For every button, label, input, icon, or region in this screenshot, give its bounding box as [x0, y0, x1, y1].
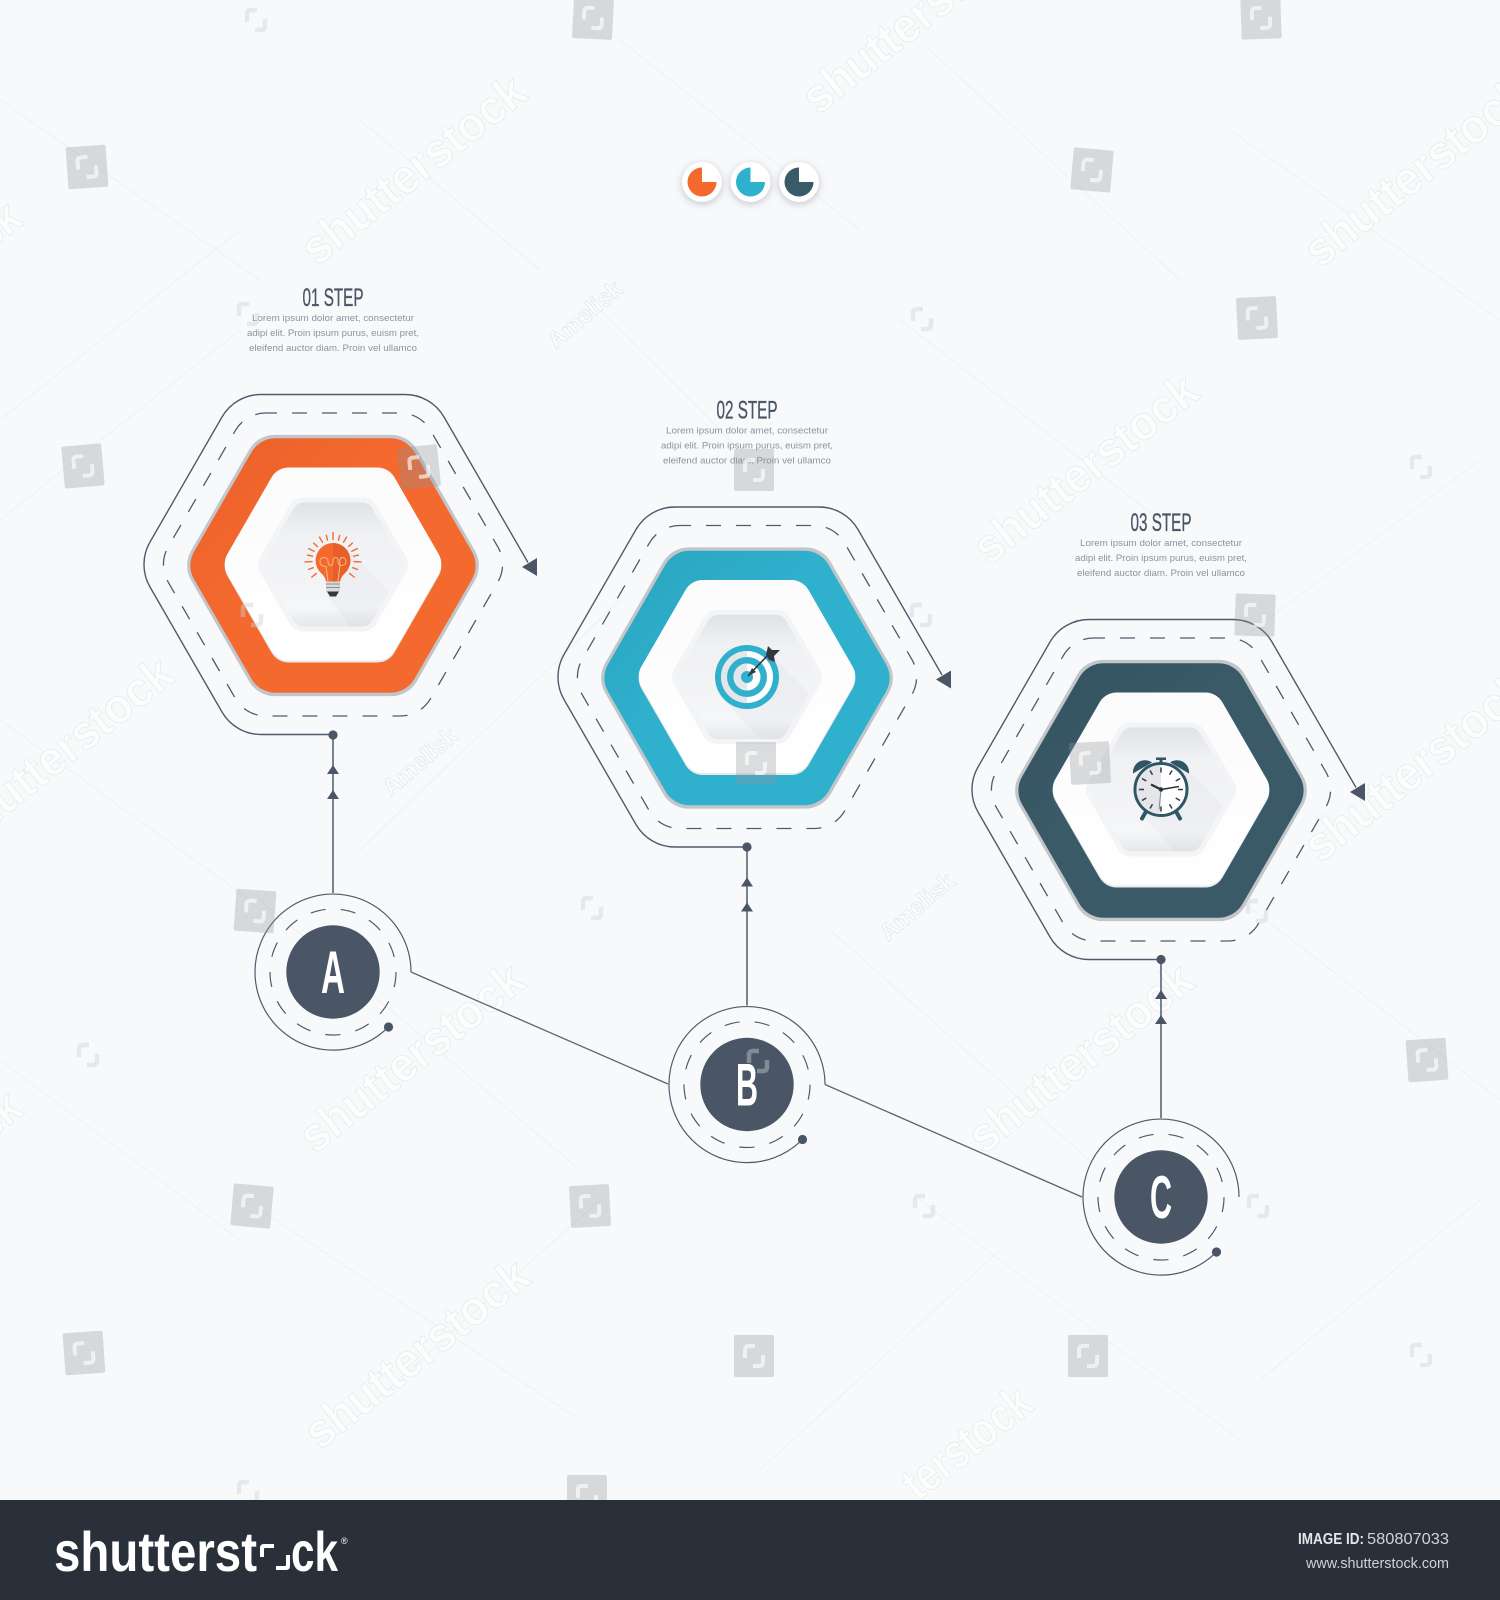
- text: Amelisk: [874, 867, 961, 947]
- hexagon 1: orange: [144, 394, 537, 734]
- icon: target with arrow: [715, 645, 780, 709]
- connector C to hexagon 3: [1155, 955, 1167, 1118]
- step 2 description: eleifend auctor diam. Proin vel ullamco: [663, 456, 831, 466]
- text: Amelisk: [377, 722, 464, 802]
- orange pie icon: [682, 162, 722, 202]
- watermark text layer: shutterstock: [289, 953, 535, 1164]
- watermark text layer: shutterstock: [291, 65, 537, 276]
- step 3 description: Lorem ipsum dolor amet, consectetur: [1080, 538, 1242, 549]
- footer logo: shutterst: [54, 1520, 257, 1583]
- step 2 description: [661, 426, 833, 466]
- site url: www.shutterstock.com: [1305, 1555, 1449, 1572]
- hexagon 3: dark teal: [972, 620, 1365, 960]
- connector line A to B: [411, 972, 668, 1084]
- footer logo: ®: [341, 1536, 348, 1546]
- dashed track: [163, 413, 503, 716]
- image number: 580807033: [1367, 1531, 1449, 1548]
- inner hexagon: [258, 498, 408, 632]
- circle node A: A: [321, 939, 345, 1006]
- circle node C: [1083, 1119, 1239, 1275]
- step 2 description: adipi elit. Proin ipsum purus, euism pret,: [661, 440, 833, 452]
- watermark text layer: terstock: [892, 1376, 1042, 1511]
- white hexagon: [639, 580, 855, 775]
- watermark text layer: shutterstock: [294, 1249, 540, 1460]
- icon: light bulb: [305, 532, 361, 596]
- coloured ring: [187, 435, 479, 696]
- connector A to hexagon 1: [327, 730, 339, 893]
- step 1 description: eleifend auctor diam. Proin vel ullamco: [249, 343, 417, 354]
- step 2 description: Lorem ipsum dolor amet, consectetur: [666, 426, 828, 436]
- icon: alarm clock: [1133, 758, 1189, 818]
- footer band: [0, 1500, 1500, 1600]
- step 3 description: [1075, 538, 1247, 579]
- connector line B to C: [825, 1084, 1082, 1197]
- white hexagon: [1053, 692, 1269, 888]
- step 1 text: [247, 284, 419, 354]
- watermark text layer: shutterstock: [958, 953, 1204, 1164]
- step 3 description: eleifend auctor diam. Proin vel ullamco: [1077, 568, 1245, 579]
- circle node C: C: [1150, 1164, 1172, 1231]
- inner hexagon: [672, 610, 822, 744]
- hexagon 2: blue: [558, 507, 951, 847]
- circle node B: [669, 1007, 825, 1163]
- step 1 heading: 01 STEP: [303, 284, 363, 312]
- image id: IMAGE ID:: [1298, 1531, 1364, 1548]
- dashed track: [991, 638, 1331, 941]
- dashed track: [577, 526, 917, 828]
- step 3 text: [1075, 509, 1247, 579]
- footer logo: ck: [291, 1520, 339, 1583]
- step 3 heading: 03 STEP: [1131, 509, 1191, 537]
- white hexagon: [225, 468, 441, 662]
- watermark text layer: shutterstock: [963, 364, 1209, 575]
- step 2 text: [661, 396, 833, 466]
- text: Amelisk: [542, 275, 629, 355]
- outer path with arrow: [972, 620, 1365, 960]
- coloured ring: [1015, 660, 1307, 921]
- outer path with arrow: [144, 394, 537, 734]
- outer path with arrow: [558, 507, 951, 847]
- pie legend icons: [682, 162, 819, 202]
- circle node B: B: [736, 1052, 758, 1118]
- inner hexagon: [1086, 722, 1236, 856]
- step 3 description: adipi elit. Proin ipsum purus, euism pret,: [1075, 553, 1247, 564]
- coloured ring: [601, 547, 893, 809]
- step 1 description: [247, 313, 419, 354]
- step 1 description: adipi elit. Proin ipsum purus, euism pret,: [247, 328, 419, 339]
- blue pie icon: [730, 162, 770, 202]
- dark pie icon: [779, 162, 819, 202]
- step 1 description: Lorem ipsum dolor amet, consectetur: [252, 313, 414, 324]
- circle node A: [255, 894, 411, 1050]
- step 2 heading: 02 STEP: [717, 396, 777, 424]
- connector B to hexagon 2: [741, 842, 753, 1006]
